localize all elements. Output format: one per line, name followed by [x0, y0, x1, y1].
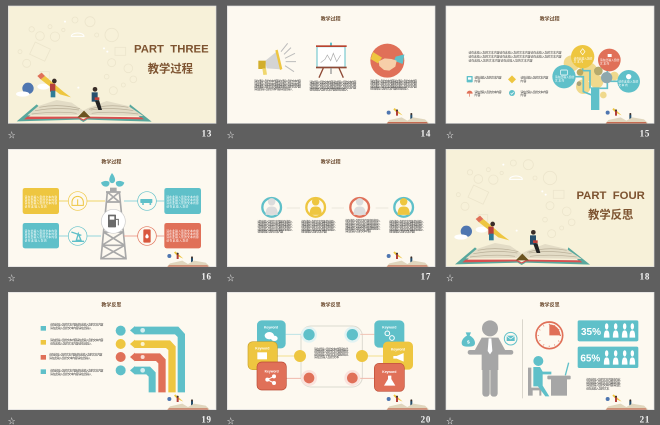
- circle: yellow top: 文本内: [574, 60, 583, 64]
- text: column 4: 请在此输入您的文本内容请在此输入: [389, 221, 424, 226]
- profile 1: [262, 198, 281, 217]
- heading: 教学反思: 教学反思: [588, 208, 633, 222]
- text: column 4: [389, 218, 424, 234]
- text: center: 请在此输入您的文本内容请在此: [314, 349, 348, 354]
- text: column 2: 请在此输入您的文本内容请在此输入: [301, 224, 336, 229]
- item 3: 请在此输入您的文本内容请在此输入: [49, 355, 91, 360]
- icon: teal check: [509, 90, 515, 96]
- arrow: teal: [130, 326, 185, 392]
- item 2: [41, 337, 103, 345]
- card: teal gears: Keyword: [382, 326, 396, 330]
- text: column 1: 请在此输入您的文本内容请在此输入您的文本内容: [254, 81, 301, 86]
- slide 13: part three cover: [8, 6, 216, 140]
- card: teal gears: [374, 320, 404, 348]
- circle: yellow top: [571, 45, 594, 68]
- text: column 2: 请在此输入您的文本内容请在此输入: [301, 218, 336, 223]
- text: column 2: 请在此输入您的文本内容: [301, 229, 327, 234]
- icon: teal document: [467, 76, 473, 82]
- text: column 1: 请在此输入您的文本内容请在此输入: [257, 226, 293, 231]
- title: 教学过程: [321, 16, 341, 23]
- card: teal bottom left: 请在此输入您的文本内容: [25, 229, 57, 233]
- mini book: [386, 251, 429, 267]
- mini book: [605, 108, 648, 123]
- text: column 2: 请在此输入您的文本内容请在此输入您的文本内容: [309, 84, 356, 89]
- card: red flask: [374, 363, 404, 391]
- card: teal top right: 请在此输入您的文本内容: [166, 195, 199, 199]
- text: column 1: 请在此输入您的文本内容请在此输入您的文本内容: [254, 78, 301, 83]
- card: yellow calendar: [248, 342, 277, 370]
- card: yellow top left: 请在此输入您的: [25, 205, 47, 209]
- nodes: [294, 327, 368, 386]
- icon: fuel pump: [101, 209, 125, 233]
- slide number: 13: [202, 129, 212, 139]
- dashes: [287, 207, 388, 209]
- item 4: [41, 368, 103, 376]
- text: legend items: [474, 75, 548, 97]
- text: legend items: 内容: [520, 92, 526, 97]
- card: red flask: Keyword: [382, 370, 396, 374]
- card: red bottom right: [164, 223, 201, 248]
- stat: 35%: 35%: [581, 327, 601, 338]
- star icon: ☆: [446, 131, 454, 140]
- text: column 1: [254, 78, 301, 91]
- text: column 2: 请在此输入您的文本内容请在此输入: [301, 226, 336, 231]
- star icon: ☆: [227, 274, 235, 283]
- title: 教学反思: [321, 302, 341, 309]
- slide 17: four profiles: [227, 149, 435, 283]
- text: paragraph: 请在此输入您的文本内容请在此输入您的文本内容请在此输入您的文本内容: [468, 53, 562, 58]
- text: legend items: 内容: [520, 78, 526, 83]
- text: column 3: 请在此输入您的文本内容: [345, 228, 371, 233]
- slide 20: keyword cards: [227, 292, 435, 425]
- slide number: 15: [640, 129, 650, 139]
- card: red share: Keyword: [265, 369, 279, 373]
- icon: businessman: [468, 320, 513, 397]
- open book illustration: [16, 17, 152, 122]
- text: column 1: 请在此输入您的文本内容请在此输入: [254, 86, 293, 91]
- item 2: 请在此输入您的文本内容请在此输入您的文本内容: [50, 337, 103, 342]
- tree diagram: [552, 45, 640, 110]
- text: column 1: 请在此输入您的文本内容请在此输入: [257, 218, 293, 223]
- text: column 1: [257, 218, 293, 234]
- slide number: 19: [201, 415, 212, 425]
- heading: 教学过程: 教学过程: [148, 61, 193, 75]
- text: paragraph: 请在此输入您的文本内容请在此输入您的文本内容请在此输入您的文本内容: [468, 50, 562, 55]
- star icon: ☆: [446, 274, 454, 283]
- text: center: 请在此输入您的文本内容请在此: [314, 346, 348, 351]
- text: column 2: 请在此输入您的文本内容请在此输入您的文本内容: [309, 82, 356, 87]
- text: column 3: [370, 78, 417, 91]
- icon: truck: [138, 192, 156, 210]
- circle: red right: 文本内: [600, 61, 610, 65]
- circle: teal far right: 请在此输入您的: [618, 80, 639, 84]
- text: column 2: 请在此输入您的文本内容请在此输入: [309, 87, 348, 92]
- card: teal chat: Keyword: [264, 326, 278, 330]
- icon: red umbrella: [467, 91, 473, 97]
- text: column 1: 请在此输入您的文本内容: [257, 229, 283, 234]
- item 1: [41, 322, 103, 331]
- card: teal bottom left: 请在此输入您的: [25, 239, 47, 243]
- text: legend items: 请在此输入您的文本内容: [474, 75, 502, 80]
- card: yellow megaphone: Keyword: [391, 347, 405, 351]
- icon: gauge: [68, 192, 87, 210]
- badges: [116, 326, 126, 375]
- text: column 3: 请在此输入您的文本内容请在此输入: [370, 86, 409, 91]
- icon: yellow diamond: [508, 75, 516, 83]
- card: yellow top left: 请在此输入您的文本内容: [25, 198, 57, 202]
- text: column 2: [309, 79, 356, 92]
- text: legend items: 请在此输入您的文本内容: [520, 75, 548, 80]
- card: teal bottom left: 请在此输入您的文本内容: [25, 235, 57, 239]
- icon: megaphone: [258, 43, 296, 75]
- icon: money bag: $: [467, 339, 470, 345]
- circle: yellow top: 请在此输入您的: [574, 56, 593, 60]
- text: column 4: 请在此输入您的文本内容请在此输入: [389, 224, 424, 229]
- slide 18: part four cover: [446, 149, 654, 283]
- arrow: red: [130, 353, 166, 392]
- text: center: 请在此输入您的文本: [314, 354, 339, 359]
- star icon: ☆: [8, 274, 16, 283]
- text: column 3: 请在此输入您的文本内容请在此输入: [345, 220, 380, 225]
- circle: red right: [598, 49, 621, 71]
- circle: red right: 请在此输入您的: [600, 58, 620, 62]
- card: red share: [257, 362, 286, 390]
- icon: clock: [536, 322, 563, 349]
- text: column 4: 请在此输入您的文本内容请在此输入: [389, 218, 424, 223]
- card: yellow top left: [23, 188, 59, 214]
- text: paragraph: 请在此输入您的文本内容请在此输入您的文本内容: [468, 57, 533, 62]
- text: column 2: 请在此输入您的文本内容请在此输入: [301, 221, 336, 226]
- icon: oil barrel: [138, 227, 156, 245]
- text: column 3: 请在此输入您的文本内容请在此输入您的文本内容: [370, 81, 417, 86]
- slide number: 14: [421, 129, 431, 139]
- title: 教学过程: [321, 159, 341, 166]
- text: column 3: 请在此输入您的文本内容请在此输入: [345, 226, 380, 231]
- card: red bottom right: 请在此输入您的文本内容: [166, 235, 199, 239]
- item 1: 请在此输入您的文本内容请在此输入您的文本内容: [50, 322, 103, 327]
- mini book: [167, 394, 210, 410]
- mini book: [167, 251, 210, 267]
- text block: 请在此输入您的文本内容请在此: [586, 382, 621, 387]
- item 2: 请在此输入您的文本内容请在此输入: [50, 340, 92, 345]
- slide number: 21: [640, 415, 650, 425]
- slide number: 17: [421, 272, 431, 282]
- title: 教学反思: [540, 302, 560, 309]
- text: center: 请在此输入您的文本内容请在此: [314, 351, 348, 356]
- slide number: 16: [201, 272, 212, 282]
- slide 16: oil tower: [8, 149, 216, 283]
- text: column 3: 请在此输入您的文本内容请在此输入您的文本内容: [370, 78, 417, 83]
- profile 3: [350, 198, 369, 217]
- profile 2: [306, 198, 325, 217]
- icon: presentation easel: [316, 43, 347, 78]
- text: legend items: 请在此输入您的文本内容: [474, 89, 502, 94]
- icon: oil pump: [68, 227, 87, 245]
- open book illustration: [454, 160, 590, 265]
- text block: 请在此输入您的文本: [586, 385, 609, 390]
- card: teal top right: 请在此输入您的: [166, 205, 189, 209]
- profile 4: [394, 198, 413, 217]
- text block: 请在此输入您的文本内容请在此: [586, 377, 621, 382]
- text: legend items: 内容: [474, 92, 480, 97]
- card: red bottom right: 请在此输入您的文本内容: [166, 232, 199, 236]
- star icon: ☆: [227, 131, 235, 140]
- mini book: [386, 394, 429, 410]
- circle: teal left: 请在此输入您的: [555, 75, 575, 79]
- item 4: 请在此输入您的文本内容请在此输入您的文本内容: [50, 368, 103, 373]
- text: column 3: 请在此输入您的文本内容请在此输入您的文本内容: [370, 83, 417, 88]
- card: red bottom right: 请在此输入您的: [166, 239, 189, 243]
- circle: teal far right: 文本内: [618, 83, 628, 87]
- stat: 65%: [578, 347, 638, 368]
- card: yellow calendar: Keyword: [255, 347, 269, 351]
- circle: teal left: [552, 65, 576, 88]
- card: yellow top left: 请在此输入您的文本内容: [25, 195, 57, 199]
- card: yellow megaphone: [383, 342, 413, 370]
- icon: person at desk: [528, 356, 571, 396]
- arrow: yellow: [130, 340, 176, 392]
- text: column 2: 请在此输入您的文本内容请在此输入您的文本内容: [309, 79, 356, 84]
- text: column 3: 请在此输入您的文本内容请在此输入: [345, 218, 380, 223]
- title: 教学反思: [101, 302, 121, 309]
- text: center: [314, 346, 348, 359]
- text: legend items: 请在此输入您的文本内容: [520, 89, 548, 94]
- item 3: 请在此输入您的文本内容请在此输入您的文本内容: [49, 352, 102, 357]
- slide 14: three icons: [227, 6, 435, 140]
- stat: 65%: 65%: [580, 353, 600, 364]
- card: teal chat: [257, 320, 286, 348]
- circle: teal left: 文本内: [555, 78, 565, 82]
- circle: teal far right: [617, 70, 640, 93]
- card: teal bottom left: 请在此输入您的文本内容: [25, 232, 57, 236]
- text: paragraph: [468, 50, 562, 62]
- title: 教学过程: [101, 159, 121, 166]
- card: teal top right: 请在此输入您的文本内容: [166, 198, 199, 202]
- text: column 4: 请在此输入您的文本内容: [389, 229, 415, 234]
- divider line: [521, 319, 523, 398]
- card: teal top right: [164, 188, 201, 214]
- star icon: ☆: [8, 131, 16, 140]
- icon: money bag: [462, 332, 475, 347]
- slide number: 18: [640, 272, 650, 282]
- arrow: teal small: [130, 366, 156, 392]
- card: teal top right: 请在此输入您的文本内容: [166, 201, 199, 205]
- icon: envelope: [504, 332, 517, 345]
- card: teal bottom left: [23, 223, 59, 248]
- heading: part three: PART THREE: [134, 43, 209, 55]
- text: column 1: 请在此输入您的文本内容请在此输入: [257, 224, 293, 229]
- text: column 4: 请在此输入您的文本内容请在此输入: [389, 226, 424, 231]
- text: column 3: [345, 218, 380, 233]
- heading: part four: PART FOUR: [576, 190, 645, 202]
- icon: oil tower: [101, 173, 126, 259]
- mini book: [386, 108, 429, 123]
- icon: handshake: [370, 44, 404, 78]
- connector lines: [59, 201, 164, 236]
- mini book: [605, 394, 648, 410]
- card: yellow top left: 请在此输入您的文本内容: [25, 201, 57, 205]
- title: 教学过程: [540, 16, 560, 23]
- item 3: [41, 352, 102, 360]
- item 1: 请在此输入您的文本内容请在此输入: [50, 325, 92, 330]
- slide 19: arrows: [8, 292, 216, 425]
- center frame and links: [277, 326, 383, 387]
- text: column 1: 请在此输入您的文本内容请在此输入: [257, 221, 293, 226]
- slide 15: tree: [446, 6, 654, 140]
- text: column 3: 请在此输入您的文本内容请在此输入: [345, 223, 380, 228]
- stat: 35%: [578, 320, 638, 341]
- text block: [586, 377, 621, 390]
- text: column 2: [301, 218, 336, 234]
- item 4: 请在此输入您的文本内容请在此输入: [50, 371, 92, 376]
- text: column 1: 请在此输入您的文本内容请在此输入您的文本内容: [254, 84, 301, 89]
- text block: 请在此输入您的文本内容请在此: [586, 379, 621, 384]
- slide 21: people stats: [446, 292, 654, 425]
- text: legend items: 内容: [474, 78, 480, 83]
- slide number: 20: [421, 415, 431, 425]
- card: red bottom right: 请在此输入您的文本内容: [166, 229, 199, 233]
